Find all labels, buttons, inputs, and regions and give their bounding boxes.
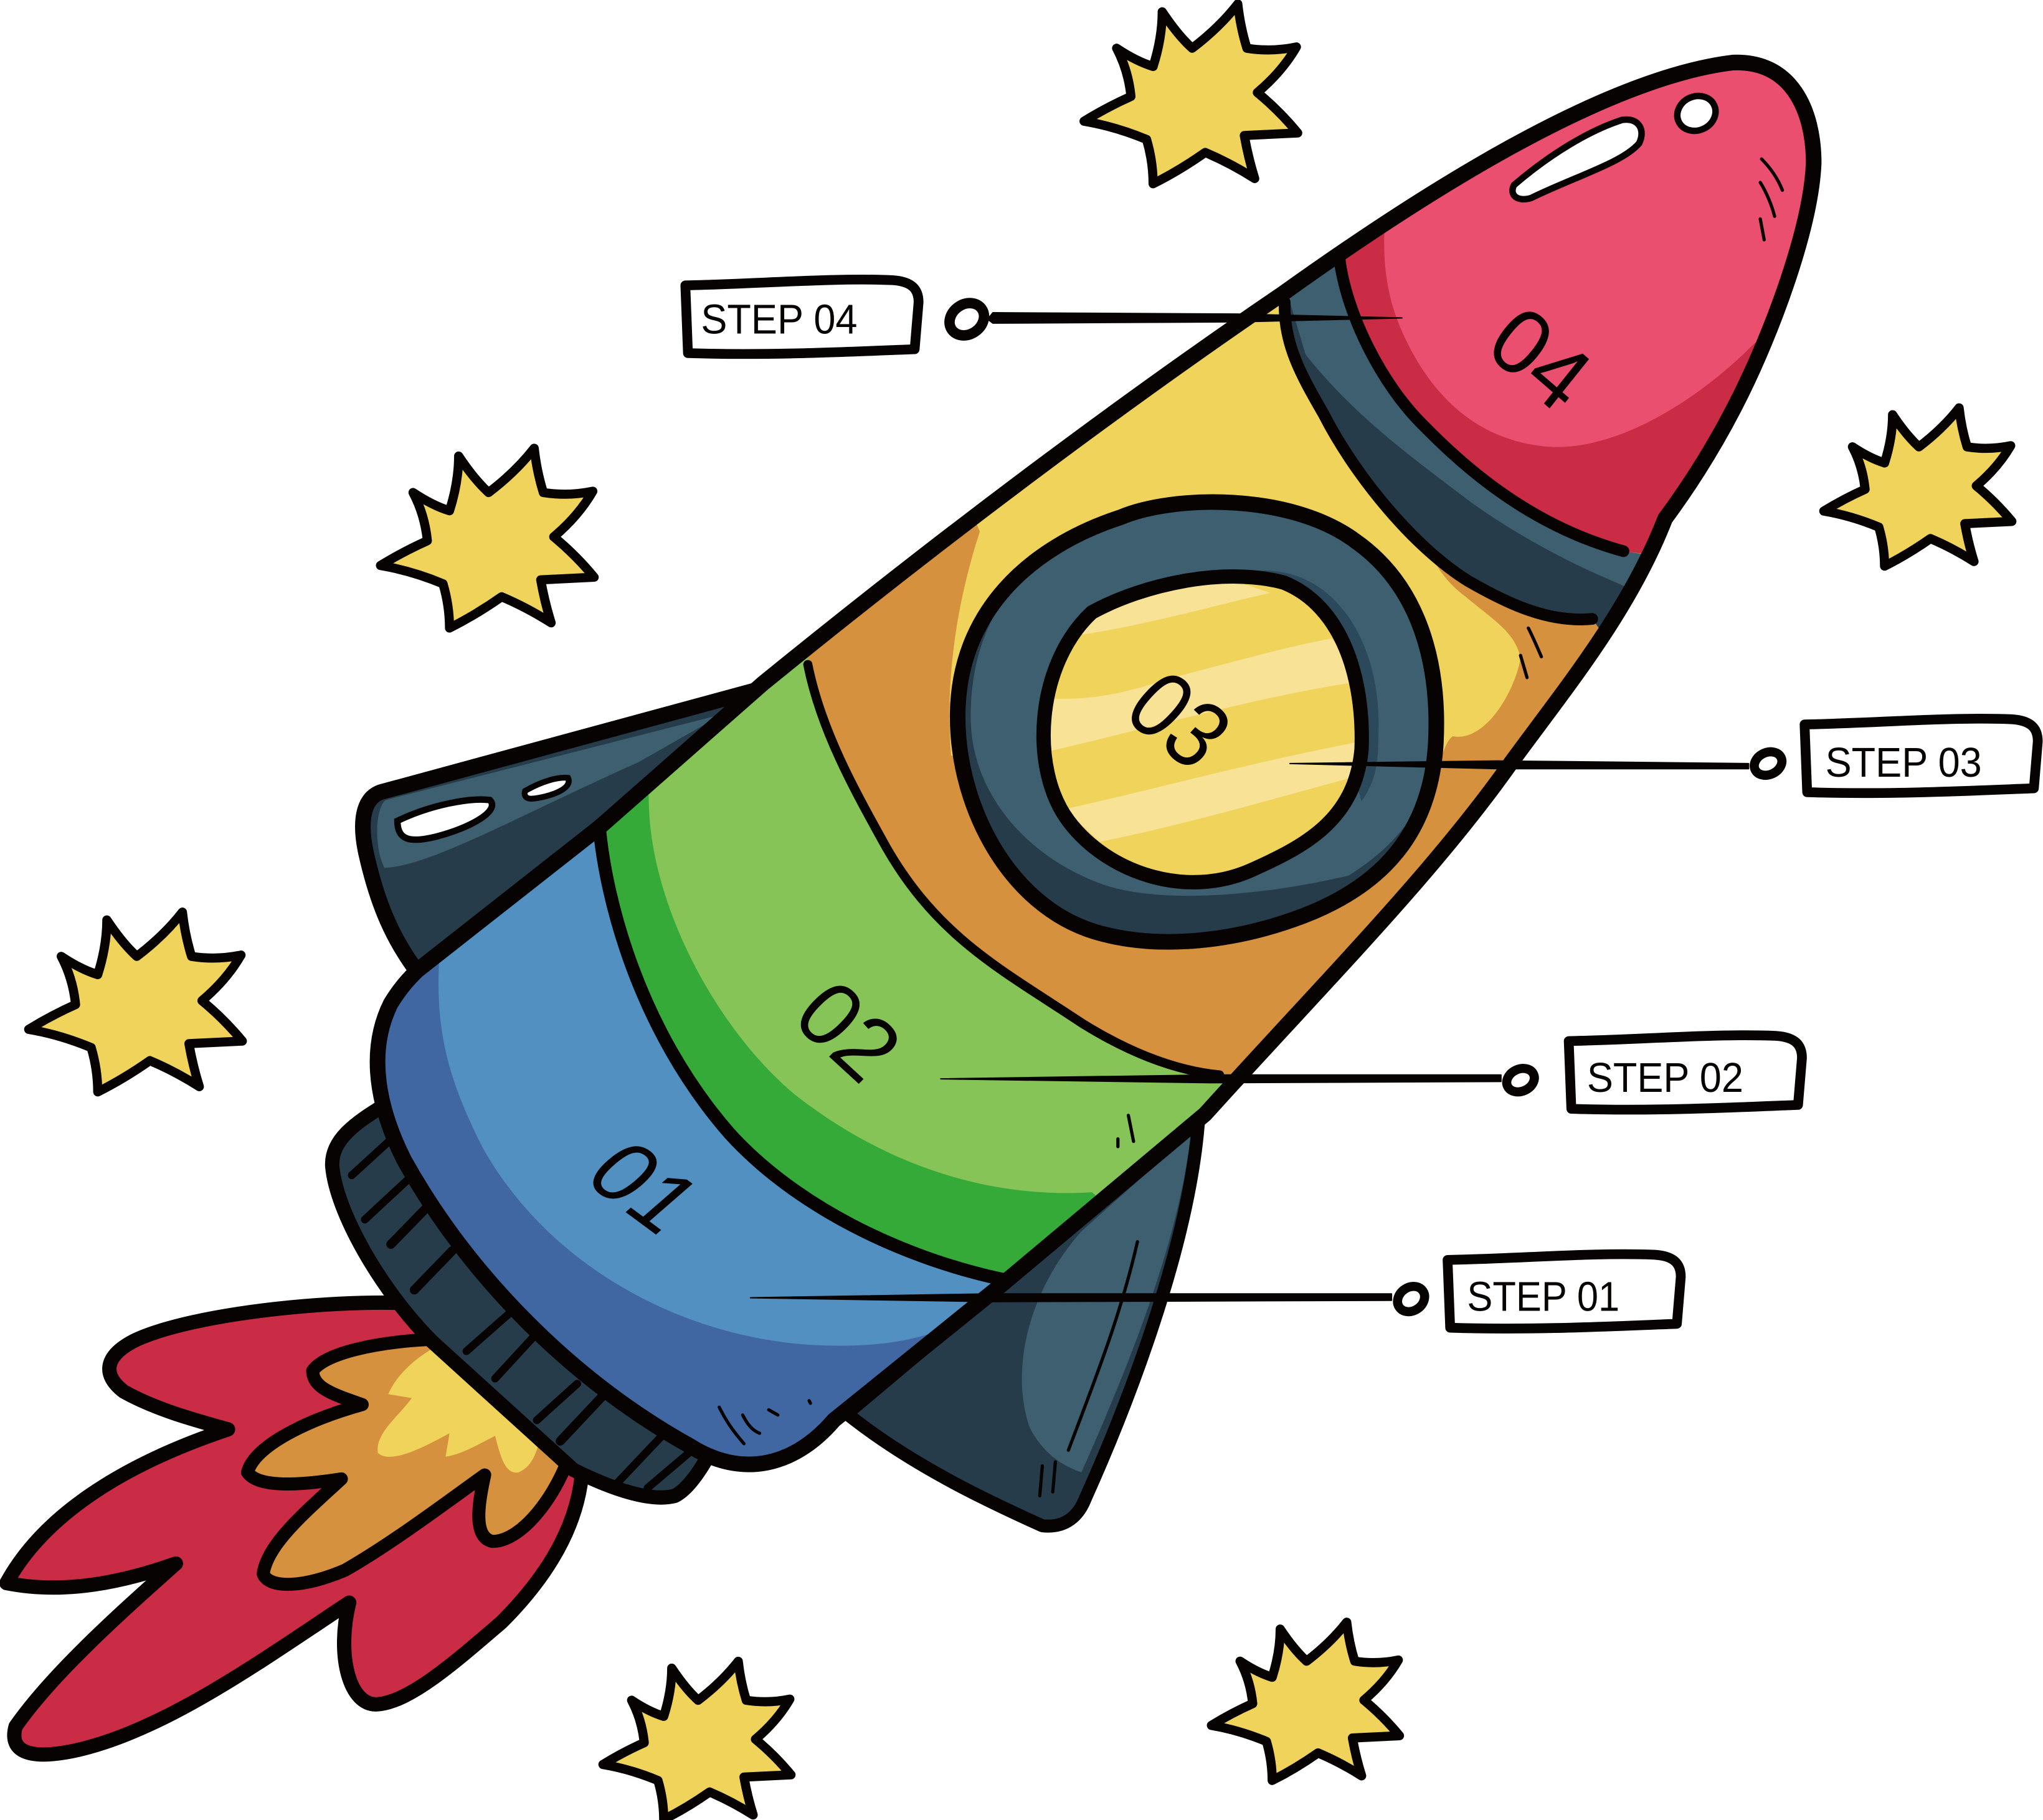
rocket flames: [6, 1302, 582, 1755]
fin window small: [524, 778, 569, 799]
leader line: [1290, 761, 1748, 769]
body outline: [377, 62, 1814, 1464]
nose highlight: round window: [1672, 90, 1722, 137]
label box: [685, 280, 919, 354]
fin shape: [847, 1118, 1198, 1526]
section: nose pink: [1384, 70, 1806, 447]
node: [1503, 1064, 1538, 1096]
flame: inner yellow: [377, 1348, 539, 1472]
section: blue light: [438, 841, 990, 1345]
section: green dark: [607, 658, 1096, 1273]
left fin: [363, 686, 769, 975]
porthole glass stripes: [1050, 584, 1355, 842]
section: band highlight: [1289, 267, 1641, 586]
porthole glass: [1043, 577, 1362, 882]
fin highlight: [1022, 1134, 1191, 1472]
label text: STEP 03: [1826, 739, 1982, 786]
star: right: [1824, 408, 2012, 566]
rocket body: [370, 55, 1821, 1472]
star: left: [29, 912, 242, 1092]
star: bottom right: [1211, 1622, 1400, 1780]
node: [1393, 1281, 1429, 1317]
flame: outer red: [6, 1302, 582, 1755]
body scratches: [719, 628, 1542, 1444]
label box: [1804, 719, 2038, 793]
leader line: [988, 313, 1402, 323]
section: nose dark red: [1345, 233, 1756, 554]
fin highlight: [377, 714, 723, 868]
callout: step 02: [941, 1035, 1802, 1110]
callout: step 01: [751, 1254, 1680, 1329]
nozzle ribs: [352, 1134, 691, 1488]
nose scratches: [1760, 159, 1783, 240]
section number 01: 01: [566, 1124, 723, 1250]
leader line: [751, 1294, 1391, 1302]
star: top: [1084, 4, 1297, 184]
label text: STEP 04: [701, 296, 857, 343]
callout: step 03: [1290, 719, 2038, 793]
section number 03: 03: [1107, 651, 1252, 789]
section: green light: [649, 657, 1223, 1196]
porthole ring highlight: [970, 502, 1436, 896]
label box: [1448, 1254, 1680, 1329]
star: upper left: [381, 448, 594, 628]
section: orange base: [808, 524, 1641, 1074]
fin shape: [363, 686, 769, 975]
section: blue dark: [385, 963, 928, 1456]
node: [943, 296, 990, 342]
section dividing lines: [599, 258, 1623, 1279]
section number 04: 04: [1471, 285, 1610, 431]
section: yellow: [949, 306, 1520, 801]
right fin: [847, 1118, 1198, 1526]
label box: [1569, 1035, 1802, 1110]
label text: STEP 02: [1587, 1055, 1743, 1101]
fin window large: [397, 800, 492, 840]
star: bottom centre: [603, 1661, 791, 1819]
fin scratches: [1040, 1242, 1137, 1495]
body colour sections: [385, 70, 1806, 1456]
leader line: [941, 1075, 1501, 1083]
flame: middle orange: [247, 1339, 568, 1585]
porthole ring outline: [958, 502, 1436, 942]
label text: STEP 01: [1467, 1273, 1619, 1320]
engine nozzle with ribs: [332, 1104, 711, 1497]
nose highlight: long window: [1512, 120, 1642, 199]
nozzle body: [332, 1104, 711, 1497]
porthole ring: [958, 502, 1436, 942]
section: dark band: [1291, 303, 1641, 628]
porthole window: [958, 502, 1436, 942]
porthole glass outline: [1043, 577, 1362, 882]
section number 02: 02: [775, 962, 921, 1101]
node: [1750, 747, 1786, 780]
callout: step 04: [685, 280, 1402, 354]
